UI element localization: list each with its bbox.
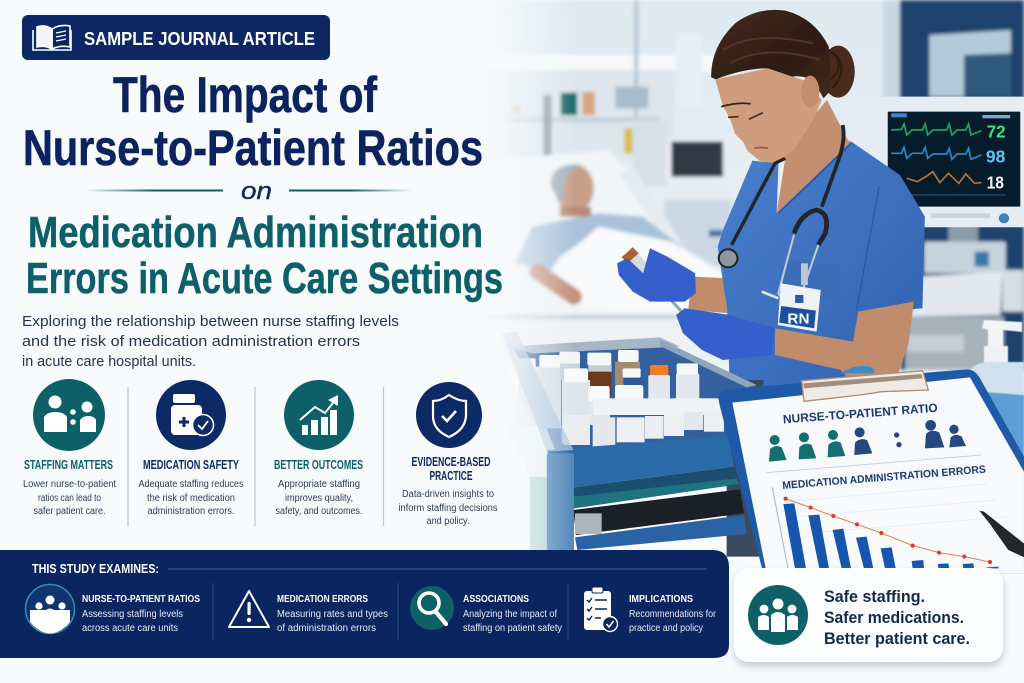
item: associations: Analyzing the impact of xyxy=(463,609,557,620)
panel: better outcomes: safety, and outcomes. xyxy=(276,506,362,517)
title: The Impact of xyxy=(113,67,377,123)
intro paragraph: and the risk of medication administration errors xyxy=(22,334,360,350)
left white fade over photo xyxy=(470,0,575,550)
item: medication errors: of administration errors xyxy=(277,623,376,634)
item: implications: Recommendations for xyxy=(629,609,717,620)
panel: medication safety: MEDICATION SAFETY xyxy=(143,458,239,472)
item: associations: ASSOCIATIONS xyxy=(463,593,529,605)
bottles xyxy=(517,350,725,448)
item: implications xyxy=(584,587,717,634)
item: associations: staffing on patient safety xyxy=(463,623,562,634)
panel: better outcomes: BETTER OUTCOMES xyxy=(274,458,363,472)
panel: staffing matters xyxy=(23,379,116,517)
patient monitor with vital signs: 18 xyxy=(987,173,1004,193)
patient monitor with vital signs: 72 xyxy=(987,122,1006,141)
pillar and dark wall xyxy=(883,0,900,100)
panel: staffing matters: STAFFING MATTERS xyxy=(24,458,113,472)
panel: evidence-based practice: PRACTICE xyxy=(430,469,472,483)
trend line xyxy=(784,497,992,564)
subtitle: medication errors: Errors in Acute Care Settings xyxy=(26,254,503,303)
bed xyxy=(480,150,730,343)
subtitle: medication errors: Medication Administration xyxy=(28,208,483,257)
panel: better outcomes xyxy=(274,380,363,517)
cart front drawers xyxy=(502,332,747,550)
subtitle: medication errors xyxy=(26,208,503,303)
title: Nurse-to-Patient Ratios xyxy=(23,120,483,176)
panel: evidence-based practice: and policy. xyxy=(426,516,470,527)
intro paragraph: in acute care hospital units. xyxy=(22,354,196,370)
panel: evidence-based practice xyxy=(398,382,498,527)
nurse right arm xyxy=(775,302,914,390)
item: implications: practice and policy xyxy=(629,623,703,634)
panel: medication safety: the risk of medication xyxy=(147,493,235,504)
item: medication errors: MEDICATION ERRORS xyxy=(277,593,368,605)
stethoscope xyxy=(719,125,844,300)
panel: better outcomes: Appropriate staffing xyxy=(278,479,360,490)
panel: better outcomes: improves quality, xyxy=(285,493,353,504)
medication tray and cart xyxy=(502,332,763,557)
title connector: on: on xyxy=(241,178,272,205)
panel: staffing matters: safer patient care. xyxy=(34,506,106,517)
intro paragraph xyxy=(22,314,399,370)
tray interior xyxy=(513,340,757,453)
photo: hospital room background xyxy=(480,0,1024,370)
callout: safe staffing xyxy=(734,568,1003,666)
icon: medicine bottle xyxy=(156,380,226,450)
panel: staffing matters: Lower nurse-to-patient xyxy=(23,479,116,490)
nurse figure xyxy=(617,10,925,390)
panel: medication safety: Adequate staffing reduces xyxy=(138,479,244,490)
panel: evidence-based practice: EVIDENCE-BASED xyxy=(412,455,490,469)
callout: safe staffing: Safe staffing. xyxy=(824,588,925,606)
callout: safe staffing: Better patient care. xyxy=(824,630,970,648)
icon: magnifier xyxy=(410,586,454,630)
icon: people group xyxy=(26,584,74,634)
item: nurse-to-patient ratios: across acute care units xyxy=(82,623,178,634)
sanitizer bottle xyxy=(965,320,1024,470)
small monitor xyxy=(664,137,732,267)
item: nurse-to-patient ratios: Assessing staffing levels xyxy=(82,609,183,620)
item: nurse-to-patient ratios xyxy=(26,584,200,634)
item: associations xyxy=(410,586,562,634)
ratio people xyxy=(769,420,966,462)
panel: evidence-based practice: Data-driven insights to xyxy=(402,489,494,500)
title xyxy=(23,67,483,176)
chart heading: ratio: NURSE-TO-PATIENT RATIO xyxy=(783,401,938,426)
nurse neck and face xyxy=(715,68,855,213)
callout: safe staffing: Safer medications. xyxy=(824,609,964,627)
patient monitor with vital signs: 98 xyxy=(986,147,1006,167)
panel: medication safety xyxy=(138,380,244,517)
clipboard with chart xyxy=(718,366,1024,573)
journal badge: SAMPLE JOURNAL ARTICLE xyxy=(84,29,315,49)
chart heading: errors: MEDICATION ADMINISTRATION ERRORS xyxy=(782,464,986,492)
gloved hands xyxy=(617,248,775,360)
panel: evidence-based practice: inform staffing decisions xyxy=(398,503,498,514)
item: medication errors: Measuring rates and types xyxy=(277,609,388,620)
icon: warning triangle xyxy=(229,591,269,627)
pen xyxy=(979,511,1024,560)
intro paragraph: Exploring the relationship between nurse staffing levels xyxy=(22,314,399,330)
RN badge: RN xyxy=(787,311,809,327)
journal badge xyxy=(22,15,330,60)
nurse left forearm xyxy=(688,277,730,313)
item: medication errors xyxy=(229,591,388,634)
icon: open book xyxy=(33,25,71,50)
vial xyxy=(622,247,685,315)
patient monitor with vital signs xyxy=(879,97,1024,227)
panel: staffing matters: ratios can lead to xyxy=(38,493,101,504)
RN badge xyxy=(778,263,821,332)
icon: checklist clipboard xyxy=(584,587,618,632)
panel: this study examines: THIS STUDY EXAMINES: xyxy=(32,562,159,576)
bar chart xyxy=(783,503,999,568)
icon: rising chart xyxy=(284,380,354,450)
panel: this study examines xyxy=(0,550,729,658)
icon: nurses ratio xyxy=(33,379,105,451)
item: implications: IMPLICATIONS xyxy=(629,593,693,605)
item: nurse-to-patient ratios: NURSE-TO-PATIENT RATIOS xyxy=(82,593,200,605)
nurse hair xyxy=(711,10,855,108)
icon: shield check xyxy=(416,382,482,448)
icon: team xyxy=(748,585,808,645)
panel: medication safety: administration errors. xyxy=(148,506,234,517)
equipment under monitor xyxy=(948,225,978,243)
clip xyxy=(840,366,874,373)
nurse scrubs xyxy=(718,142,925,390)
